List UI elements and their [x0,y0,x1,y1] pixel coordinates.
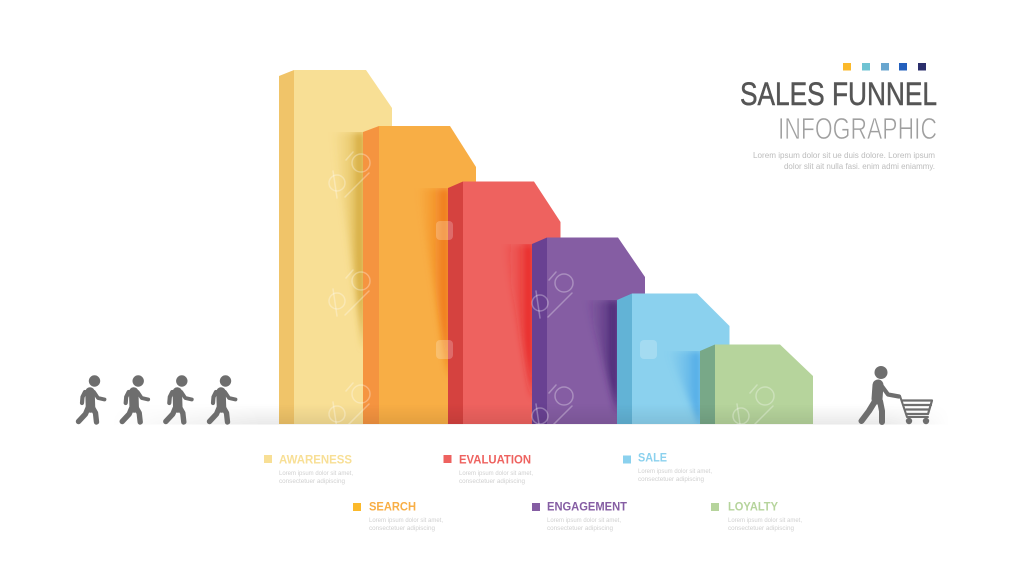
bar: awareness [279,70,392,424]
subtitle: INFOGRAPHIC [778,111,937,146]
legend: search: consectetuer adipiscing [369,525,435,532]
legend: engagement [532,500,628,532]
description text: dolor slit ait nulla fasi. enim admi eniammy. [784,161,935,171]
description text [753,150,935,171]
legend: engagement: ENGAGEMENT [547,500,628,514]
legend: loyalty: LOYALTY [728,500,778,514]
bar: search [363,126,476,424]
legend: search: SEARCH [369,500,416,514]
floor shadow [172,412,923,424]
icon: walking customers [78,375,236,422]
bar: loyalty [700,344,813,424]
legend: search: Lorem ipsum dolor sit amet, [369,517,443,524]
legend: sale: SALE [638,450,667,464]
legend: loyalty [711,500,802,532]
panel: funnel bars [279,70,813,428]
legend: engagement: Lorem ipsum dolor sit amet, [547,517,621,524]
legend: awareness: Lorem ipsum dolor sit amet, [279,470,353,477]
legend: search [353,500,443,532]
legend: evaluation: Lorem ipsum dolor sit amet, [459,470,533,477]
legend: awareness: AWARENESS [279,452,352,466]
legend: evaluation: EVALUATION [459,452,531,466]
bar: engagement [532,238,645,424]
legend: loyalty: Lorem ipsum dolor sit amet, [728,517,802,524]
legend: sale: consectetuer adipiscing [638,476,704,483]
legend: evaluation [444,452,533,485]
icon: customer with shopping cart [862,366,932,424]
legend: awareness: consectetuer adipiscing [279,478,345,485]
legend: sale: Lorem ipsum dolor sit amet, [638,468,712,475]
bar: evaluation [448,182,560,424]
icon: walker 2 [122,375,148,422]
legend: loyalty: consectetuer adipiscing [728,525,794,532]
icon: walker 1 [78,375,104,422]
legend: engagement: consectetuer adipiscing [547,525,613,532]
title: SALES FUNNEL [740,76,937,112]
legend: sale [623,450,712,483]
icon: walker 3 [166,375,192,422]
color swatches [843,63,926,70]
legend: evaluation: consectetuer adipiscing [459,478,525,485]
watermarks [329,152,774,431]
description text: Lorem ipsum dolor sit ue duis dolore. Lorem ipsum [753,150,935,160]
sales funnel infographic [76,63,936,532]
legend: awareness [264,452,353,485]
icon: walker 4 [210,375,236,422]
bar: sale [617,294,730,428]
